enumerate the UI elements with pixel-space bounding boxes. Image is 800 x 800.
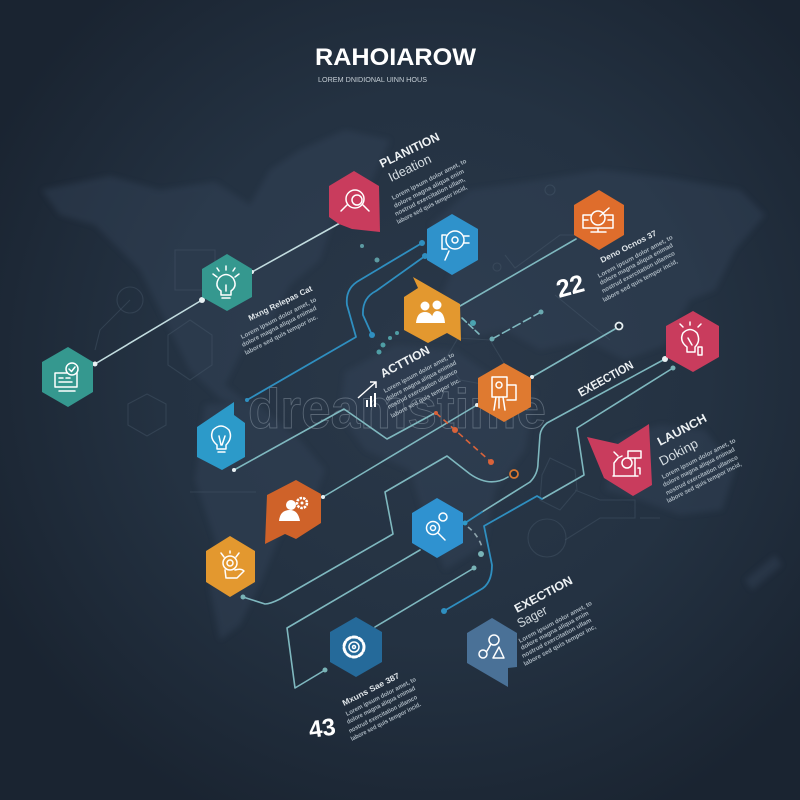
- text block: data note: labore sed quis tempor incid,: [602, 258, 679, 304]
- text block: execution lower: Lorem ipsum dolor amet, to: [518, 600, 594, 645]
- text block: execution lower: [512, 573, 598, 668]
- text block: planition: Lorem ipsum dolor amet, to: [391, 158, 468, 202]
- text block: launch: Dokinp: [656, 436, 700, 469]
- text block: planition: [377, 130, 469, 226]
- icon: magnifier with gears: [426, 513, 447, 540]
- icon: rising arrow chart: [358, 382, 376, 407]
- text block: teal note: Lorem ipsum dolor amet, to: [240, 296, 318, 341]
- text block: bottom note: [341, 671, 423, 743]
- icon: lightbulb: [213, 266, 239, 298]
- text block: planition: nostrud exercitation ullam,: [394, 176, 467, 218]
- subtitle: LOREM DNIDIONAL UINN HOUS: [318, 77, 427, 84]
- text block: teal note: Mxng Relepas Cat: [247, 284, 314, 323]
- number: 43: 43: [307, 713, 337, 744]
- connector lines: [95, 223, 673, 688]
- step: blue bulb: [197, 402, 245, 470]
- text block: execution lower: dolore magna aliqua enim: [520, 610, 590, 652]
- circuit decoration: [95, 185, 660, 557]
- text block: data note: Lorem ipsum dolor amet, to: [597, 234, 674, 280]
- text block: action: nostrud exercitation ullamco: [387, 368, 459, 411]
- step: red launch: [587, 424, 652, 496]
- connector dots: [92, 240, 676, 672]
- watermark: dreamstime: [248, 377, 546, 440]
- text block: bottom note: Mxuns Sae 387: [341, 671, 402, 708]
- text block: launch: dolore magna aliqua enimad: [662, 446, 736, 489]
- text block: action: dolore magna aliqua enimad: [385, 359, 458, 403]
- step: red magnifier: [329, 171, 380, 232]
- icon: presentation board: [492, 377, 516, 410]
- icon: idea bulb and hand: [221, 551, 244, 578]
- text block: data note: dolore magna aliqua enimad: [599, 242, 675, 287]
- icon: monitor with check: [55, 363, 78, 391]
- text block: bottom note: labore sed quis tempor incid.: [350, 701, 423, 743]
- text block: launch: nostrud exercitation ullamco: [665, 454, 739, 497]
- icon: lightbulb: [212, 426, 230, 452]
- icon: magnifier: [341, 190, 369, 211]
- text block: action: [378, 343, 462, 420]
- step: amber people: [404, 277, 461, 343]
- step: blue magnifier: [412, 498, 463, 558]
- step: teal lightbulb: [202, 254, 252, 311]
- step: orange book target: [574, 190, 624, 250]
- text block: teal note: labore sed quis tempor inc.: [244, 314, 319, 357]
- text block: execution lower: Sager: [514, 602, 550, 631]
- text block: data note: [597, 228, 679, 304]
- step: blue gauge: [427, 214, 478, 275]
- text block: planition: PLANITION: [377, 130, 442, 171]
- text block: execution lower: EXECTION: [512, 573, 575, 616]
- icon: launch machine: [613, 451, 641, 476]
- text block: launch: labore sed quis tempor incid,: [666, 461, 743, 505]
- text block: bottom note: nostrud exercitation ullamco: [348, 694, 419, 735]
- text block: launch: [655, 411, 743, 505]
- title: RAHOIAROW: [315, 44, 476, 71]
- text block: teal note: dolore magna aliqua enimad: [241, 305, 318, 349]
- world map background: [42, 130, 782, 640]
- step: navy gear: [330, 617, 382, 677]
- text block: launch: Lorem ipsum dolor amet, to: [661, 437, 737, 481]
- text block: action: labore sed quis tempor inc.: [390, 377, 462, 420]
- icon: gauge magnifier: [442, 231, 469, 260]
- icon: two people: [416, 300, 445, 323]
- step: red bulb: [666, 311, 719, 372]
- icon: gear: [344, 637, 364, 657]
- step: orange gear person: [265, 480, 321, 544]
- step: amber bulb: [206, 536, 255, 597]
- icon: target on book: [583, 208, 613, 232]
- heading: execution right: EXEECTION: [576, 358, 636, 400]
- text block: execution lower: nostrud exercitation ullam: [521, 617, 593, 660]
- text block: action: ACTTION: [378, 343, 432, 381]
- step: steel shapes: [467, 618, 517, 687]
- number: 22: 22: [553, 270, 587, 304]
- step: orange easel: [478, 363, 531, 422]
- icon: person and gear: [279, 498, 307, 521]
- text block: data note: Deno Ocnos 37: [599, 228, 659, 265]
- text block: bottom note: dolore magna aliqua enimad: [346, 685, 417, 726]
- icon: lightbulb and tube: [680, 322, 702, 355]
- text block: planition: dolore magna aliqua enim: [393, 168, 466, 210]
- text block: execution lower: labore sed quis tempor inc,: [523, 623, 598, 668]
- text block: planition: labore sed quis tempor incid,: [396, 184, 469, 226]
- text block: data note: nostrud exercitation ullamco: [601, 250, 677, 295]
- text block: bottom note: Lorem ipsum dolor amet, to: [345, 676, 418, 718]
- step: teal monitor: [42, 347, 93, 407]
- icon: circle network: [479, 635, 504, 658]
- text block: teal note: [240, 284, 319, 357]
- text block: planition: Ideation: [386, 151, 434, 185]
- text block: action: Lorem ipsum dolor amet, to: [383, 351, 456, 395]
- text block: launch: LAUNCH: [655, 411, 709, 449]
